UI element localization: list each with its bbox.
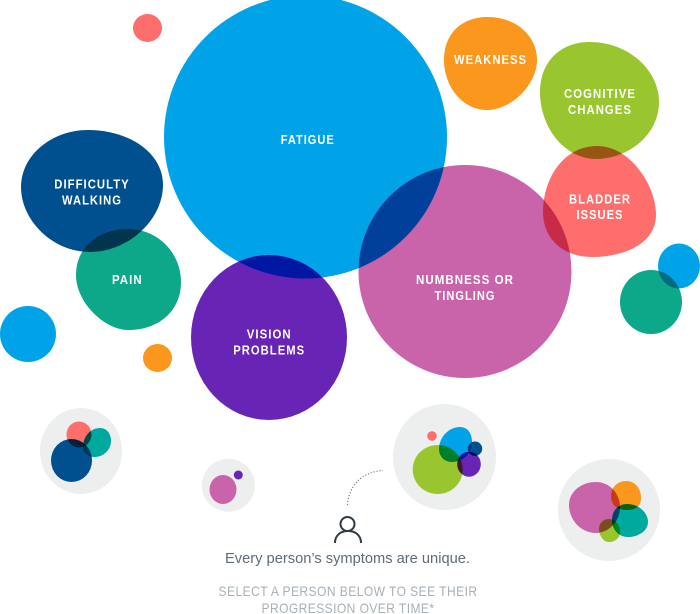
- bubble: pain: [76, 229, 181, 330]
- label: bladder issues: ISSUES: [576, 207, 624, 222]
- small bubble: orange: [143, 344, 172, 372]
- person cluster 2: [202, 459, 255, 512]
- bubble: bladder issues: [543, 146, 656, 257]
- small bubble: blue right: [658, 244, 700, 288]
- label: cognitive changes: CHANGES: [568, 102, 632, 117]
- bubble: fatigue: [164, 0, 447, 278]
- small bubble: teal right: [620, 270, 682, 334]
- dotted connector: [348, 470, 383, 505]
- label: numbness or tingling: NUMBNESS OR: [416, 272, 514, 287]
- label: difficulty walking: WALKING: [62, 193, 122, 208]
- text: every person's symptoms are unique: Every person’s symptoms are unique.: [225, 550, 470, 567]
- bubble: numbness or tingling: [358, 165, 572, 378]
- person cluster 4: [558, 459, 660, 561]
- label: numbness or tingling: TINGLING: [434, 288, 496, 303]
- bubble: cognitive changes: [540, 42, 659, 159]
- label: vision problems: VISION: [247, 326, 292, 341]
- icon: person: [335, 517, 361, 543]
- small bubble: salmon: [133, 14, 162, 42]
- text: select a person below: SELECT A PERSON BELOW TO SEE THEIR: [218, 583, 478, 599]
- bubble: weakness: [444, 17, 537, 110]
- label: fatigue: FATIGUE: [281, 132, 335, 147]
- bubble: vision problems: [191, 255, 347, 420]
- person cluster 3: [393, 404, 496, 510]
- label: cognitive changes: COGNITIVE: [564, 86, 636, 101]
- label: difficulty walking: DIFFICULTY: [54, 177, 130, 192]
- person cluster 1: [40, 408, 122, 494]
- label: bladder issues: BLADDER: [569, 192, 631, 206]
- small bubble: blue left: [0, 306, 56, 362]
- label: vision problems: PROBLEMS: [233, 342, 305, 357]
- label: weakness: WEAKNESS: [454, 52, 527, 67]
- bubble: difficulty walking: [21, 130, 163, 252]
- label: pain: PAIN: [112, 272, 143, 287]
